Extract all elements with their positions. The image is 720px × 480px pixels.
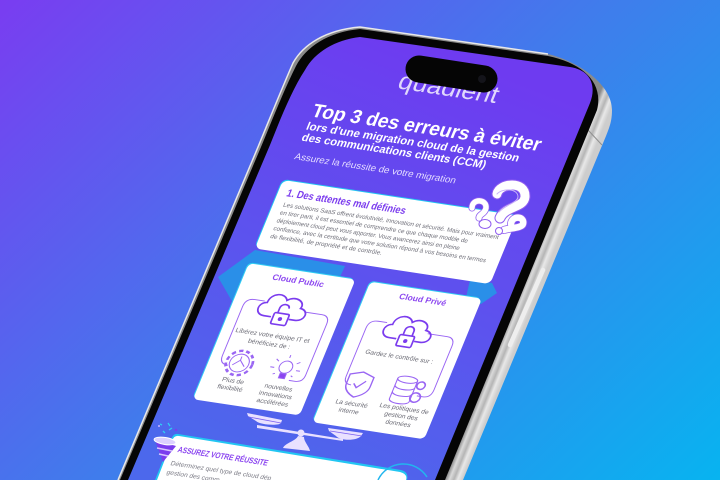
decorative arc [378, 464, 427, 480]
body text: erreur 1: confiance, avec la certitude que votre solution répond à vos besoins en termes [272, 225, 487, 264]
label: politiques: gestion des [383, 411, 420, 422]
body text: erreur 1: Les solutions SaaS offrent évolutivité, innovation et sécurité. Mais pour vraiment [282, 202, 500, 241]
icon: cloud with open lock [256, 294, 306, 326]
blue decorative band left [218, 250, 345, 302]
panel: assurez votre réussite [155, 434, 407, 480]
text: gardez le contrôle: Gardez le contrôle sur : [364, 349, 434, 366]
logo: quadient [394, 68, 504, 109]
icon: dynamic island [419, 69, 486, 83]
icon: question marks [472, 185, 525, 234]
label: innovations: nouvelles [263, 383, 294, 394]
label: sécurité: interne [337, 407, 360, 416]
label: innovations: innovations [258, 390, 294, 401]
label: politiques: Les politiques de [378, 402, 430, 416]
label: sécurité [336, 399, 368, 414]
icon: light bulb [270, 355, 300, 380]
blue decorative arrow right [465, 280, 497, 304]
label: politiques [380, 402, 428, 428]
heading: cloud public: Cloud Public [271, 272, 326, 289]
heading: cloud privé: Cloud Privé [398, 291, 448, 308]
label: innovations [256, 384, 292, 407]
tagline: Assurez la réussite de votre migration [293, 152, 458, 186]
label: flexibilité: Plus de [221, 376, 245, 386]
phone black bezel [120, 29, 598, 480]
icon: cloud with closed lock [382, 316, 432, 348]
text: libérez votre équipe: bénéficiez de : [247, 338, 291, 351]
heading: erreur 1: 1. Des attentes mal définies [285, 188, 408, 217]
label: politiques: données [384, 419, 412, 429]
panel: cloud public [192, 262, 356, 415]
label: sécurité: La sécurité [334, 398, 369, 410]
phone side button [510, 270, 543, 345]
connector frame [343, 320, 457, 398]
panel: cloud privé [312, 281, 482, 439]
body text: erreur 1: en tirer parti, il est essentiel de comprendre ce que chaque modèle de [279, 210, 469, 245]
phone silver frame [118, 27, 612, 480]
subtitle: lors d'une migration cloud de la gestion [304, 121, 521, 164]
phone screen [128, 37, 593, 480]
connector frame [217, 298, 332, 382]
icon: gear [224, 350, 254, 376]
panel: erreur 1 [254, 179, 519, 284]
phone antenna band [588, 130, 602, 145]
phone left edge highlight [118, 27, 548, 480]
icon: party cone with confetti [154, 423, 177, 462]
screen content [154, 76, 542, 480]
subtitle: des communications clients (CCM) [300, 132, 488, 171]
icon: shield [345, 371, 375, 398]
title: Top 3 des erreurs à éviter [308, 101, 545, 156]
label: flexibilité: flexibilité [216, 383, 244, 394]
body text: erreur 1 [270, 202, 499, 262]
icon: balance scale [247, 413, 363, 451]
phone mockup [118, 27, 612, 480]
heading: assurez votre réussite: ASSUREZ VOTRE RÉUSSITE [176, 445, 270, 468]
icon: database with gears [388, 376, 426, 404]
body text: erreur 1: de flexibilité, de propriété et de contrôle. [269, 233, 383, 257]
body text: erreur 1: déploiement cloud peut vous apporter. Vous avancerez ainsi en pleine [275, 218, 461, 252]
label: flexibilité [217, 376, 244, 392]
text: libérez votre équipe: Libérez votre équipe IT et [234, 327, 311, 345]
label: innovations: accélérées [255, 397, 290, 409]
